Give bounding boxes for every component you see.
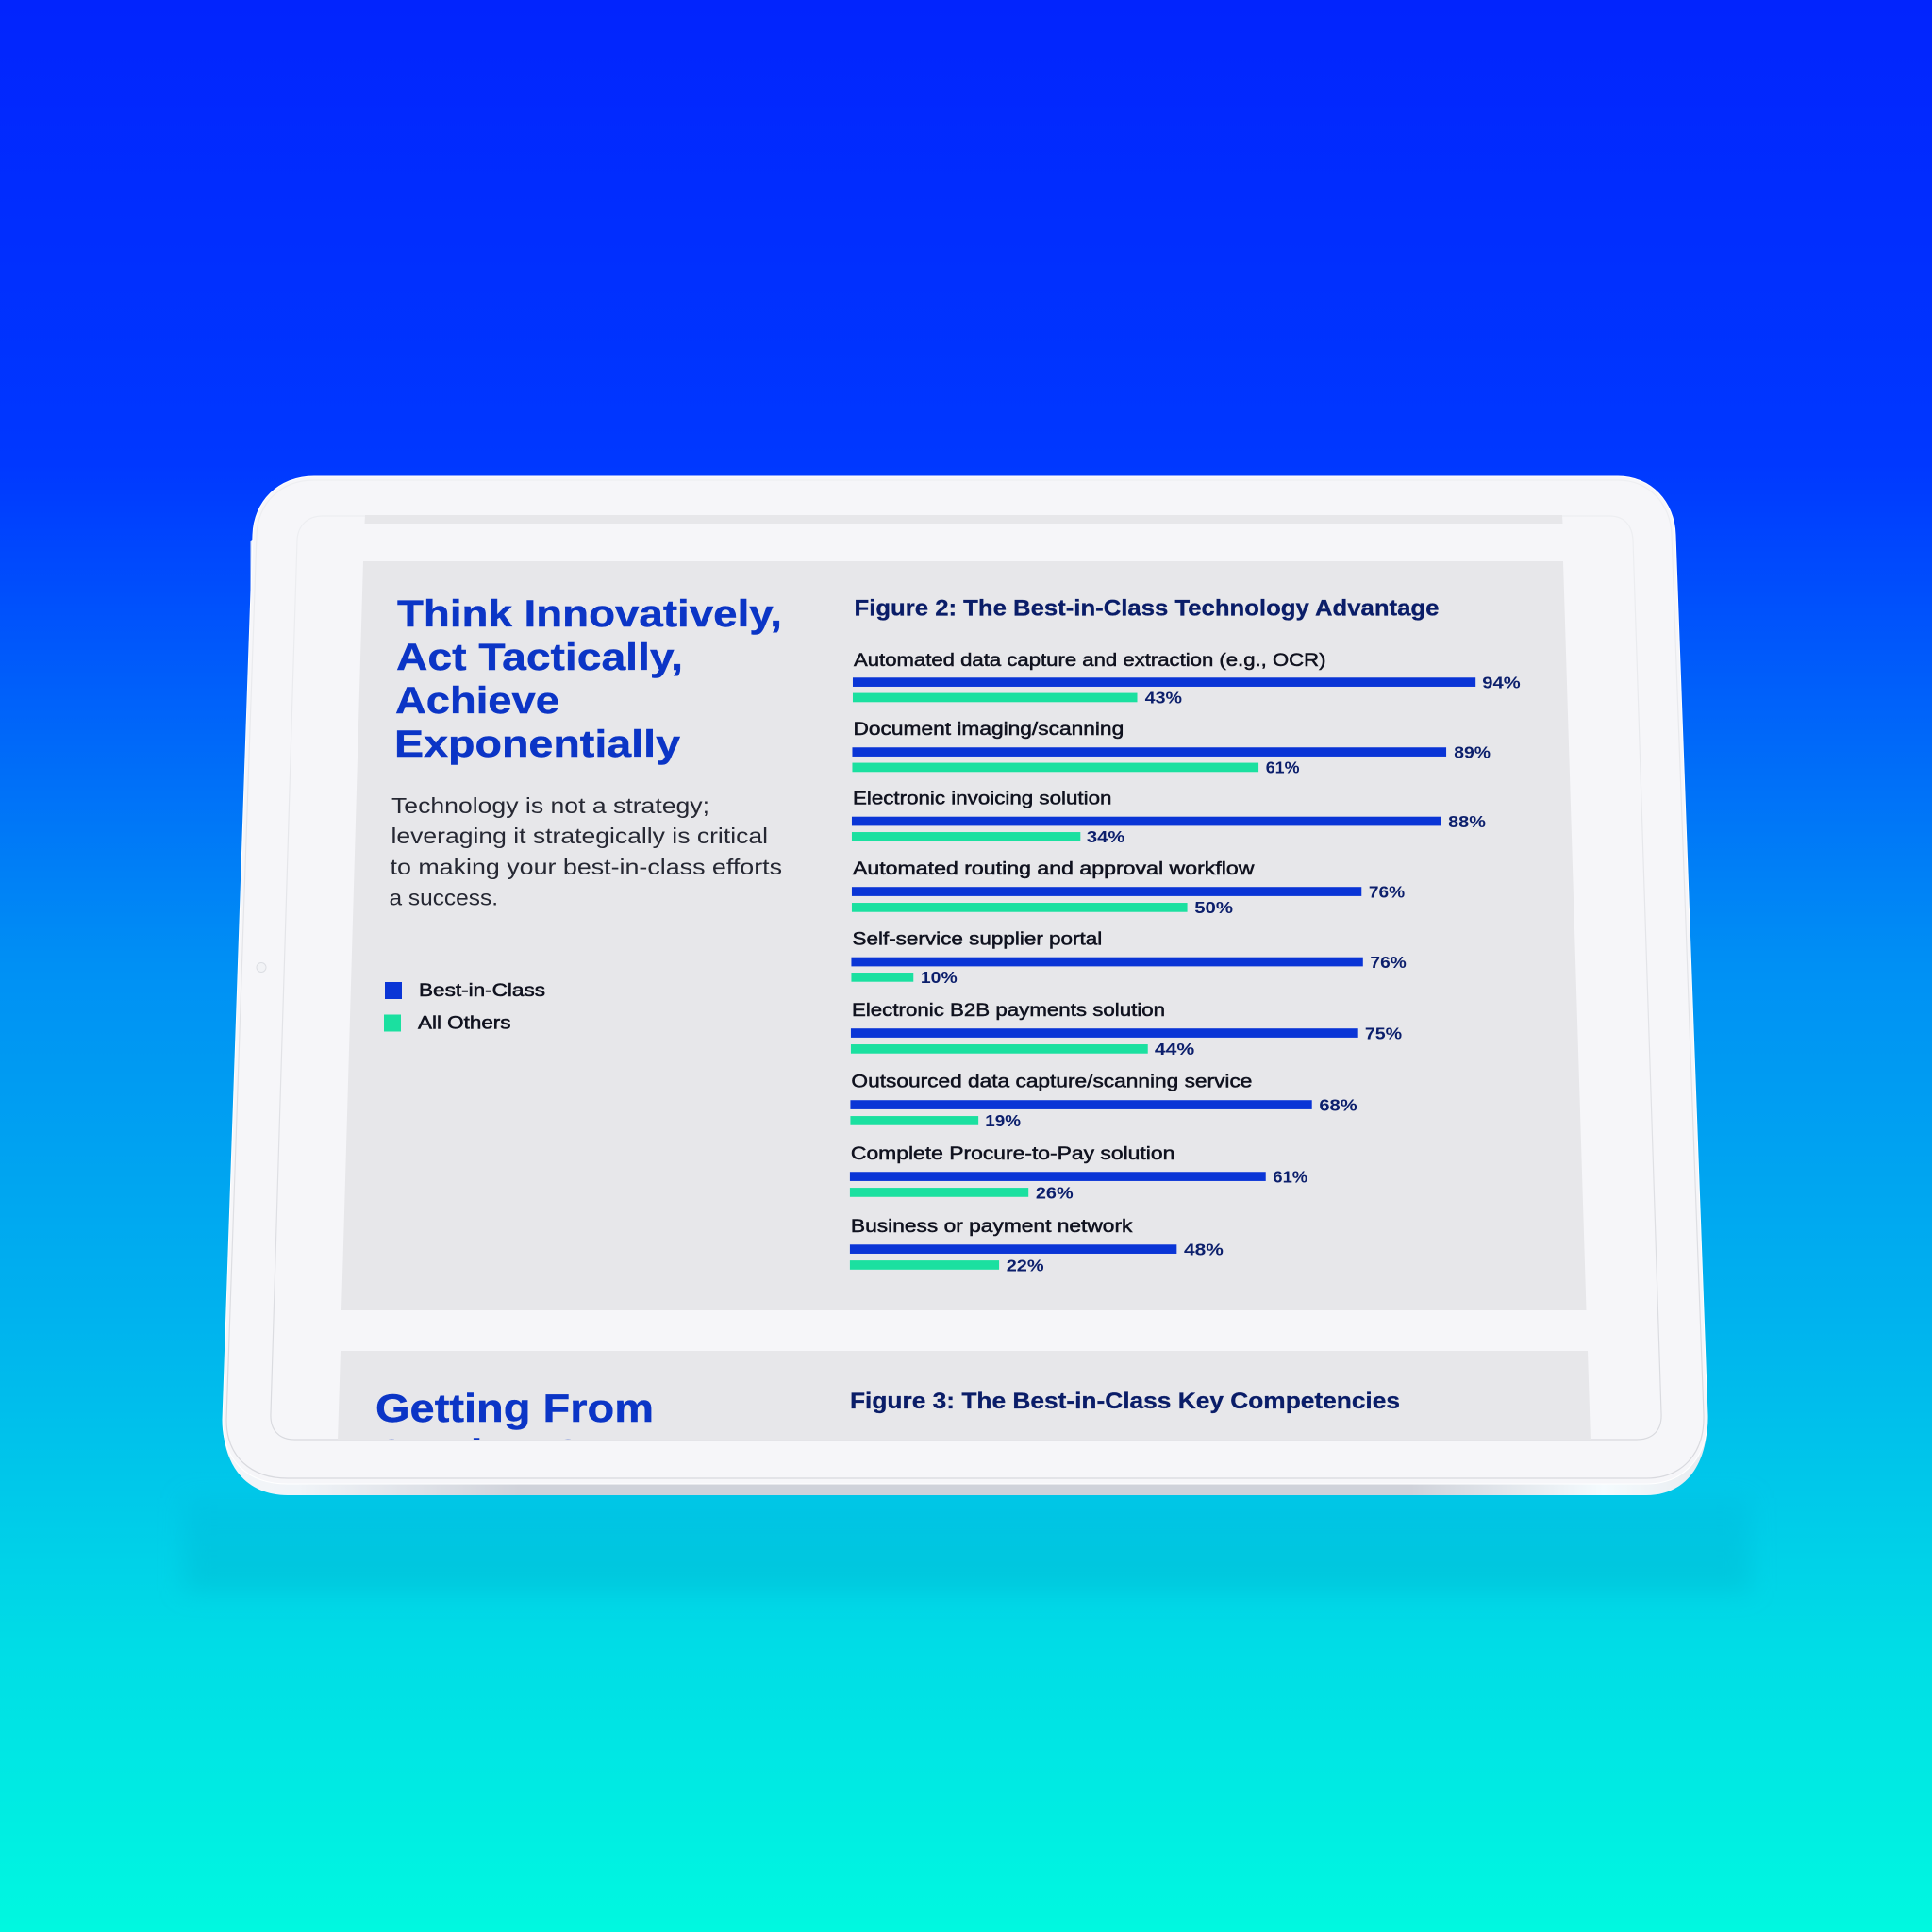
row: automated data capture: 43% xyxy=(1145,688,1182,707)
row: electronic b2b payments xyxy=(851,1000,1402,1058)
bezel inner edge line xyxy=(226,480,1704,1478)
row: outsourced data capture: 19% xyxy=(985,1111,1021,1130)
row: document imaging: 89% xyxy=(1454,742,1491,761)
heading: think innovatively: Act Tactically, xyxy=(396,637,683,678)
body text: leveraging it strategically is critical xyxy=(391,824,768,848)
row: self-service portal: Self-service supplier portal xyxy=(852,928,1102,949)
legend: all others: All Others xyxy=(418,1013,511,1034)
body text xyxy=(389,793,782,909)
heading: second line cut off: Good To Great xyxy=(375,1431,658,1475)
tablet front face xyxy=(223,476,1707,1484)
screen outline xyxy=(271,516,1661,1440)
row: electronic invoicing: Electronic invoicing solution xyxy=(853,788,1111,808)
heading: getting from: Getting From xyxy=(375,1386,654,1430)
heading: think innovatively: Think Innovatively, xyxy=(397,593,782,635)
row: self-service portal: 10% xyxy=(921,968,958,987)
row: document imaging: Document imaging/scanning xyxy=(853,719,1124,740)
body text: Technology is not a strategy; xyxy=(391,793,709,818)
row: electronic invoicing xyxy=(852,788,1486,846)
camera dot xyxy=(257,962,266,972)
row: automated routing: 50% xyxy=(1194,898,1233,917)
row: complete procure-to-pay: 26% xyxy=(1036,1183,1074,1202)
row: complete procure-to-pay: 61% xyxy=(1273,1167,1307,1186)
legend: all others xyxy=(384,1013,511,1034)
row: automated data capture: Automated data capture and extraction (e.g., OCR) xyxy=(854,650,1326,671)
row: electronic invoicing: 34% xyxy=(1087,827,1124,846)
heading: think innovatively xyxy=(394,593,782,765)
row: outsourced data capture: Outsourced data capture/scanning service xyxy=(851,1071,1252,1091)
row: business or payment network: Business or payment network xyxy=(851,1216,1133,1237)
row: document imaging xyxy=(852,719,1491,776)
row: document imaging: 61% xyxy=(1266,758,1300,776)
row: electronic b2b payments: 44% xyxy=(1155,1040,1194,1058)
body text: a success. xyxy=(389,885,498,909)
heading: think innovatively: Achieve xyxy=(395,680,559,722)
body text: to making your best-in-class efforts xyxy=(391,855,782,879)
panel: figure 2 page xyxy=(341,561,1587,1310)
legend: best-in-class: Best-in-Class xyxy=(419,980,545,1001)
row: electronic invoicing: 88% xyxy=(1448,812,1486,831)
row: automated data capture: 94% xyxy=(1482,673,1521,691)
bar chart: figure 2 xyxy=(850,595,1521,1274)
row: outsourced data capture xyxy=(850,1071,1357,1130)
row: self-service portal xyxy=(851,928,1407,987)
row: automated routing: Automated routing and approval workflow xyxy=(853,858,1256,879)
previous page strip xyxy=(364,515,1562,524)
row: automated routing xyxy=(852,858,1405,917)
row: self-service portal: 76% xyxy=(1370,953,1407,972)
tablet drop shadow xyxy=(184,1498,1750,1591)
row: automated routing: 76% xyxy=(1369,882,1405,901)
row: automated data capture xyxy=(853,650,1521,707)
tablet device xyxy=(223,476,1707,1495)
panel background xyxy=(338,1351,1591,1441)
legend: best-in-class xyxy=(385,980,545,1001)
panel: figure 3 page, clipped by screen xyxy=(338,1351,1591,1440)
row: business or payment network xyxy=(850,1216,1224,1274)
chart title: figure 3: Figure 3: The Best-in-Class Key Competencies xyxy=(850,1389,1400,1414)
row: business or payment network: 22% xyxy=(1007,1256,1044,1274)
row: complete procure-to-pay: Complete Procure-to-Pay solution xyxy=(851,1143,1174,1164)
legend xyxy=(384,980,545,1034)
row: electronic b2b payments: 75% xyxy=(1365,1024,1402,1042)
tablet side edge xyxy=(223,1321,1707,1495)
panel background xyxy=(341,561,1587,1310)
heading: think innovatively: Exponentially xyxy=(394,724,681,765)
chart title: Figure 2: The Best-in-Class Technology Advantage xyxy=(855,595,1439,621)
row: outsourced data capture: 68% xyxy=(1319,1095,1357,1114)
row: business or payment network: 48% xyxy=(1184,1241,1224,1259)
row: complete procure-to-pay xyxy=(850,1143,1307,1202)
side button xyxy=(251,540,255,592)
row: electronic b2b payments: Electronic B2B payments solution xyxy=(852,1000,1165,1021)
